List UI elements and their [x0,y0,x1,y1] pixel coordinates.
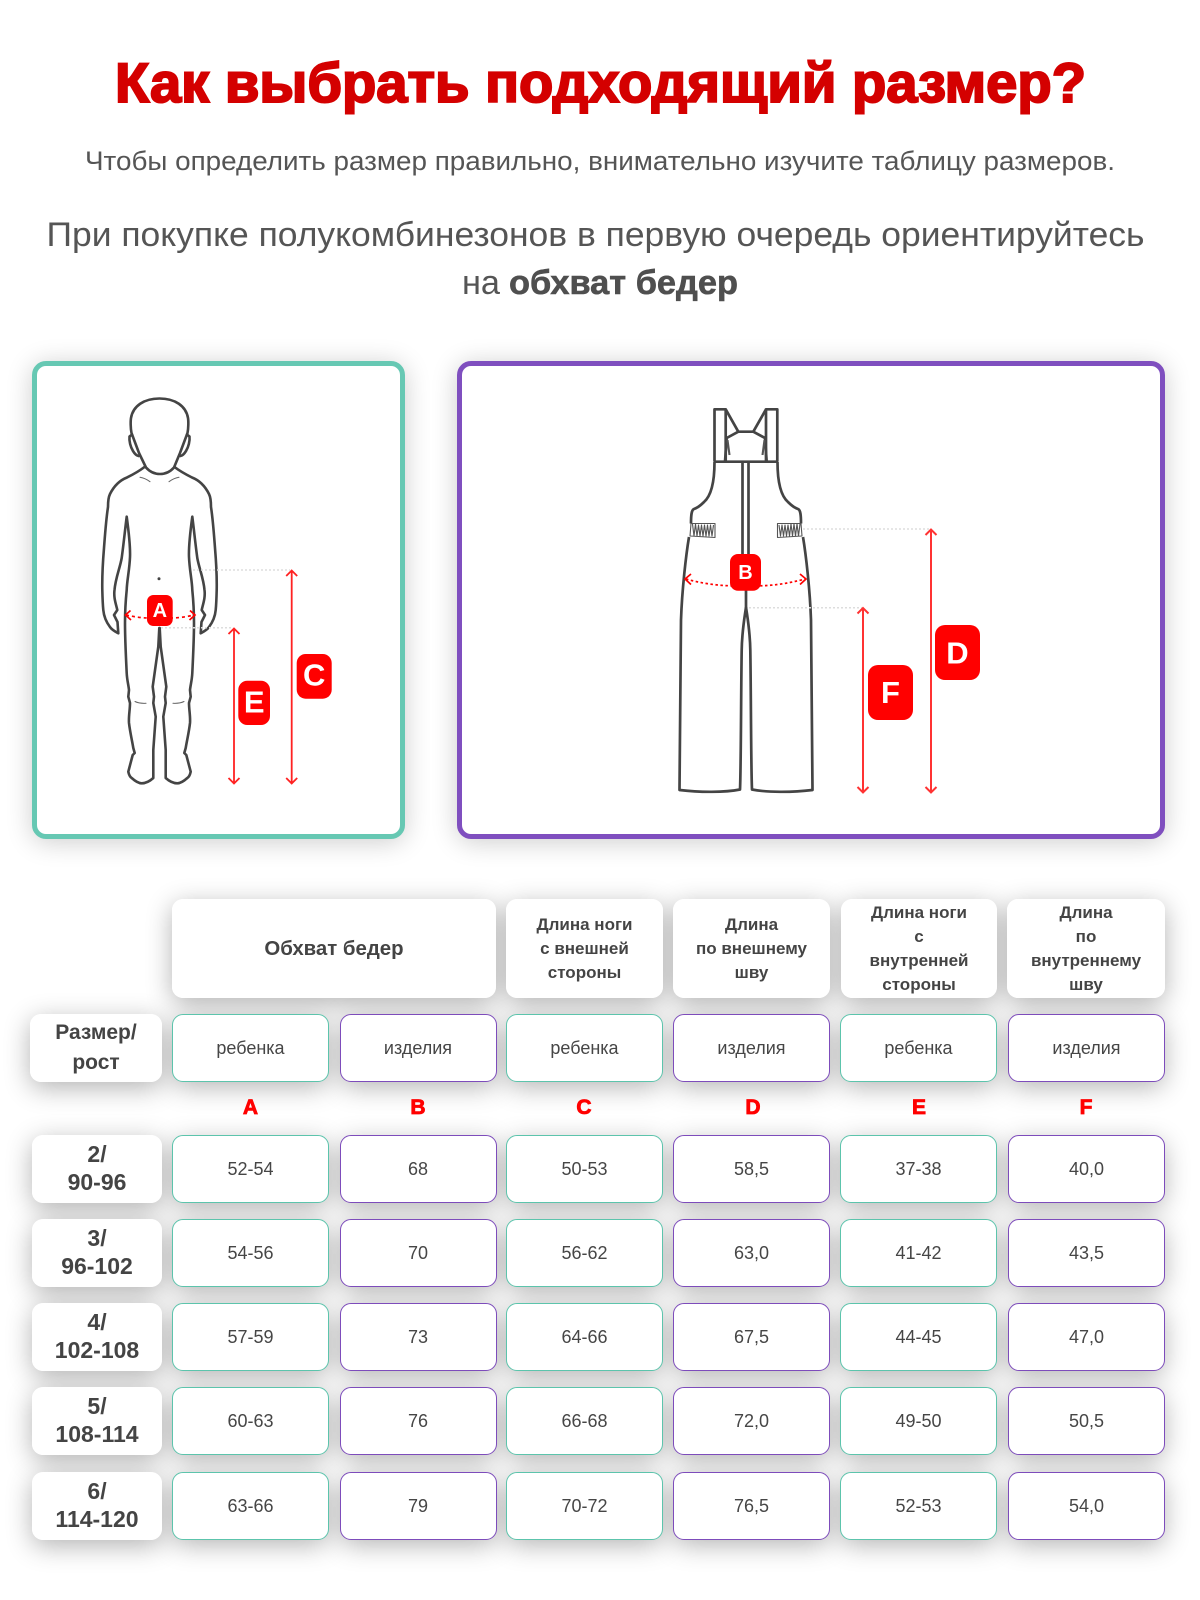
table: subheader row: изделия [717,1038,786,1058]
table row: size 2: 50-53 [561,1159,608,1179]
table row: size 3: 41-42 [895,1243,942,1263]
table: subheader row: изделия [1052,1038,1121,1058]
table row: size 6 [16,1464,1180,1562]
table row: size 5: 60-63 [227,1411,274,1431]
table row: size 5 [16,1378,1180,1540]
header: inner leg length: с [914,926,924,946]
header: outer seam length: Длина [725,914,778,934]
badge F: F [881,675,900,710]
icon: child outline [102,398,217,783]
guide lines [161,570,290,628]
table: column letters: B [410,1096,426,1119]
table: subheader row: ребенка [884,1038,953,1058]
table row: size 4 [16,1294,1180,1540]
subheader cells [172,1014,329,1082]
header: outer seam length: шву [735,962,768,982]
header: outer seam length [673,899,830,998]
instruction text: обхват бедер [509,264,738,302]
header: hip circumference [172,899,496,998]
table: header row [156,890,1180,1020]
table row: size 4: 57-59 [227,1327,274,1347]
table row: size 5: 50,5 [1069,1411,1104,1431]
table row: size 2: 52-54 [227,1159,274,1179]
table row: size 3: 3/ [87,1225,107,1251]
table row: size 6: 54,0 [1069,1496,1104,1516]
badge D [935,625,980,680]
header: inner leg length: стороны [882,974,956,994]
table row: size 2 [16,1126,1180,1540]
table: column letters: E [912,1096,926,1119]
table row: size 5: 5/ [87,1393,107,1419]
table row: size 4: 47,0 [1069,1327,1104,1347]
header: inner seam length: внутреннему [1031,950,1141,970]
table row: size 6: 6/ [87,1478,107,1504]
label: size and height: Размер/ [55,1021,137,1044]
table row: size 3: 54-56 [227,1243,274,1263]
subtitle text: Чтобы определить размер правильно, внимательно изучите таблицу размеров. [85,146,1115,176]
table row: size 3: 96-102 [61,1253,133,1279]
arrow: measurement F [858,608,868,792]
badge C: C [303,658,325,692]
header: hip circumference: Обхват бедер [264,938,404,960]
table row: size 5: 49-50 [895,1411,942,1431]
table row: size 2: 58,5 [734,1159,769,1179]
table row: size 4: 64-66 [561,1327,608,1347]
header: outer leg length [506,899,663,998]
table row: size 6: 52-53 [895,1496,942,1516]
table row: size 3: 63,0 [734,1243,769,1263]
table: column letters: D [745,1096,761,1119]
table: subheader row [14,1004,1180,1540]
figure: overalls with measurement marks [678,408,980,794]
table row: size 4: 67,5 [734,1327,769,1347]
arrow: hip circumference A [126,610,195,620]
table row: size 4: 102-108 [55,1337,139,1363]
panel: child measurements [32,361,405,839]
badge D: D [946,636,969,670]
table row: size 2: 40,0 [1069,1159,1104,1179]
header: inner seam length: шву [1069,974,1103,994]
badge A: A [153,600,167,622]
table row: size 6: 79 [408,1496,428,1516]
guide lines [749,529,930,608]
header: outer leg length: стороны [548,962,621,982]
badge F [868,665,913,720]
arrow: measurement C [286,570,297,784]
header: inner leg length [841,899,997,998]
table row: size 6: 63-66 [227,1496,274,1516]
table row: size 2: 2/ [87,1141,107,1167]
table row: size 5: 66-68 [561,1411,608,1431]
arrow: measurement E [228,628,240,784]
table: column letters: F [1080,1096,1092,1119]
badge E [238,681,270,725]
table row: size 3: 70 [408,1243,428,1263]
label: size and height: рост [72,1050,120,1074]
header: inner seam length [1007,899,1165,998]
table row: size 2: 37-38 [895,1159,942,1179]
badge C [297,654,332,699]
icon: overalls outline [680,409,812,792]
header: inner leg length: Длина ноги [871,902,967,922]
table: subheader row: ребенка [550,1038,619,1058]
subheader cells: ребенка [216,1038,285,1058]
instruction text: на [462,264,501,302]
table row: size 5: 76 [408,1411,428,1431]
table row: size 3: 43,5 [1069,1243,1104,1263]
table row: size 4: 73 [408,1327,428,1347]
table row: size 3 [16,1210,1180,1540]
table: column letters [242,1096,1092,1119]
arrow: measurement D [926,530,936,792]
label: size and height [30,1014,162,1082]
panel: overalls measurements [457,361,1165,839]
header: inner seam length: по [1076,926,1096,946]
badge A [147,595,173,626]
table row: size 6: 76,5 [734,1496,769,1516]
table: subheader row: изделия [384,1038,452,1058]
header: outer leg length: Длина ноги [536,914,632,934]
table: column letters: C [576,1096,592,1119]
table row: size 4: 44-45 [895,1327,942,1347]
badge E: E [244,684,265,720]
table row: size 5: 72,0 [734,1411,769,1431]
figure: child body with measurement marks [100,397,332,785]
badge B: B [738,562,753,584]
instruction text: При покупке полукомбинезонов в первую очередь ориентируйтесь [46,216,1144,254]
table row: size 6: 70-72 [561,1496,608,1516]
header: inner seam length: Длина [1059,902,1113,922]
badge B [730,554,761,591]
table row: size 6: 114-120 [55,1506,139,1532]
header: outer seam length: по внешнему [696,938,807,958]
table: column letters: A [243,1096,258,1119]
table row: size 4: 4/ [87,1309,107,1335]
header: inner leg length: внутренней [870,950,968,970]
title: Как выбрать подходящий размер? [115,51,1086,114]
table row: size 2: 68 [408,1159,428,1179]
header: outer leg length: с внешней [540,938,629,958]
arrow: hip circumference B [685,574,806,586]
table row: size 3: 56-62 [561,1243,608,1263]
table row: size 2: 90-96 [68,1169,126,1195]
table row: size 5: 108-114 [55,1421,139,1447]
instruction text [46,216,1144,302]
